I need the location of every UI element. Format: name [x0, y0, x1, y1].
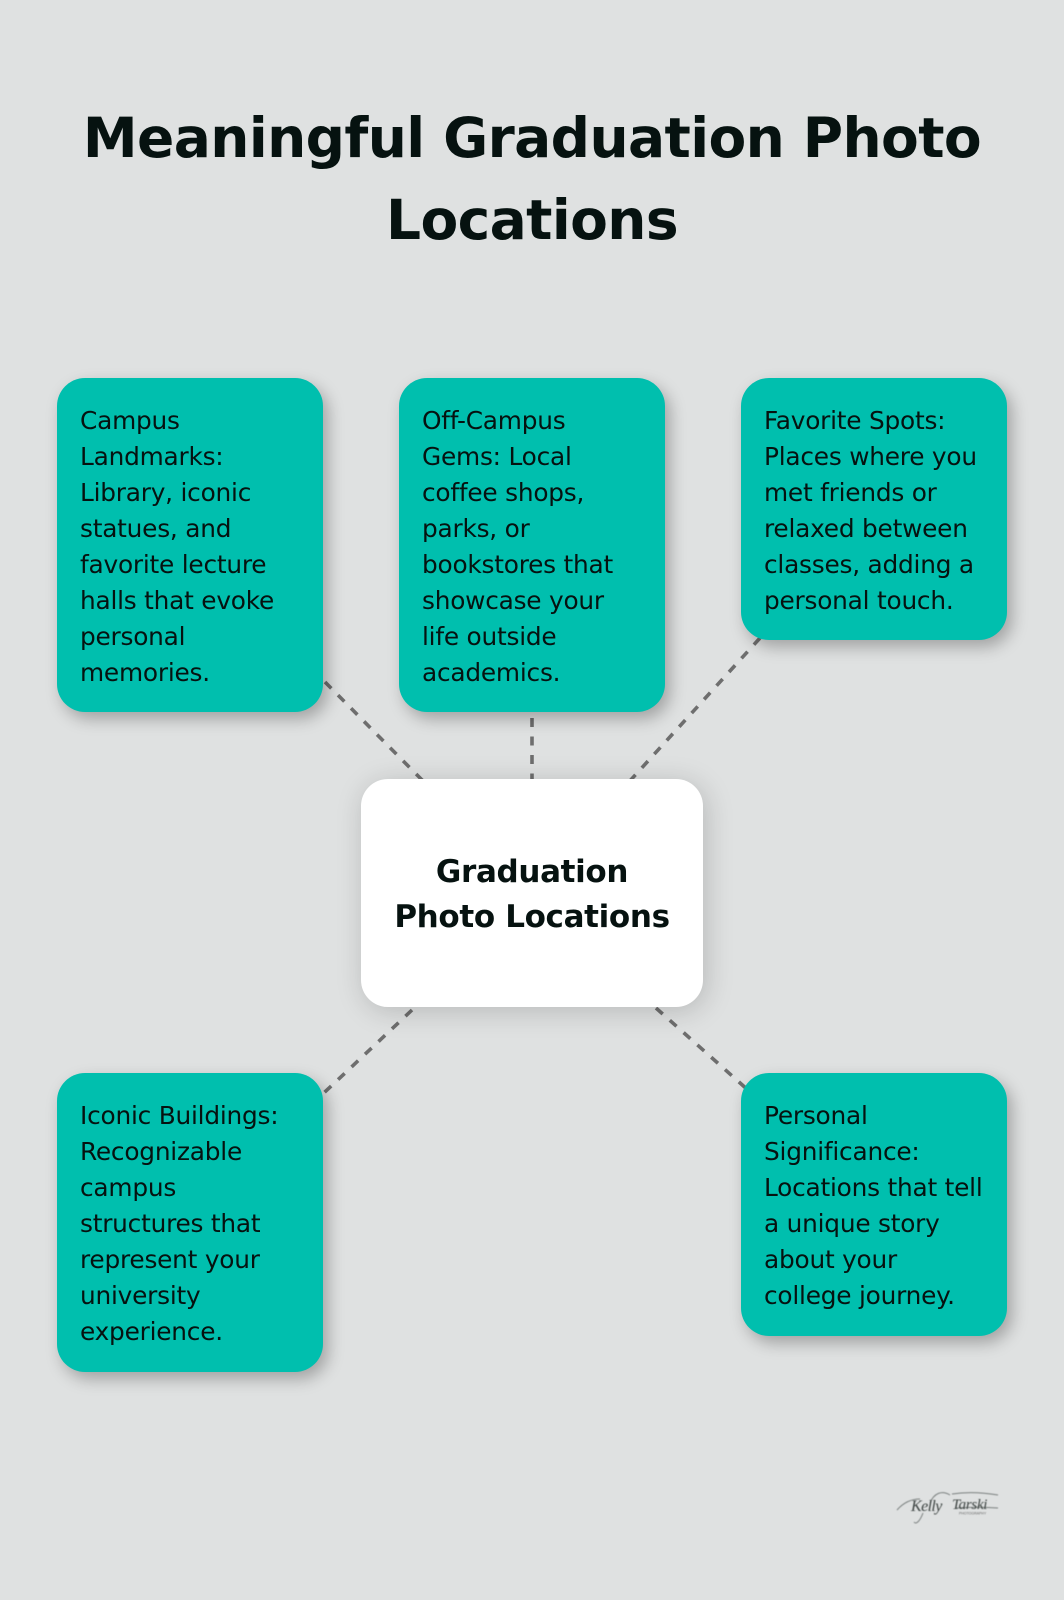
- panel: off-campus gems: bookstores that: [422, 550, 613, 579]
- panel: campus landmarks: Landmarks:: [80, 442, 223, 471]
- panel: favorite spots: met friends or: [764, 478, 937, 507]
- panel: personal significance: college journey.: [764, 1281, 955, 1310]
- panel: off-campus gems: showcase your: [422, 586, 604, 615]
- panel: off-campus gems: parks, or: [422, 514, 530, 543]
- title: Locations: [386, 188, 678, 252]
- panel: off-campus gems: Gems: Local: [422, 442, 572, 471]
- panel: personal significance: Significance:: [764, 1137, 920, 1166]
- panel: personal significance: [741, 1073, 1007, 1336]
- panel: favorite spots: [741, 378, 1007, 640]
- panel: favorite spots: personal touch.: [764, 586, 954, 615]
- panel: favorite spots: Places where you: [764, 442, 977, 471]
- panel: iconic buildings: [57, 1073, 323, 1372]
- panel: personal significance: Personal: [764, 1101, 868, 1130]
- panel: off-campus gems: life outside: [422, 622, 556, 651]
- panel: personal significance: Locations that tell: [764, 1173, 982, 1202]
- panel: campus landmarks: favorite lecture: [80, 550, 266, 579]
- panel: campus landmarks: personal: [80, 622, 185, 651]
- panel: off-campus gems: academics.: [422, 658, 560, 687]
- logo: signature: Kelly: [910, 1498, 943, 1515]
- logo: signature: Tarski: [952, 1497, 987, 1513]
- panel: iconic buildings: Iconic Buildings:: [80, 1101, 278, 1130]
- panel: center node: Graduation: [436, 854, 628, 890]
- logo: signature: [896, 1492, 998, 1524]
- panel: off-campus gems: coffee shops,: [422, 478, 584, 507]
- panel: center node: Photo Locations: [394, 899, 670, 935]
- title: Meaningful Graduation Photo: [83, 106, 981, 170]
- panel: personal significance: about your: [764, 1245, 897, 1274]
- panel: favorite spots: Favorite Spots:: [764, 406, 945, 435]
- title: [83, 106, 981, 252]
- panel: campus landmarks: halls that evoke: [80, 586, 274, 615]
- panel: center node: [361, 779, 703, 1007]
- panel: off-campus gems: Off-Campus: [422, 406, 565, 435]
- panel: favorite spots: relaxed between: [764, 514, 968, 543]
- panel: favorite spots: classes, adding a: [764, 550, 974, 579]
- logo: signature: PHOTOGRAPHY: [959, 1512, 987, 1516]
- panel: iconic buildings: campus: [80, 1173, 176, 1202]
- panel: campus landmarks: statues, and: [80, 514, 231, 543]
- panel: iconic buildings: represent your: [80, 1245, 260, 1274]
- panel: campus landmarks: [57, 378, 323, 712]
- panel: iconic buildings: experience.: [80, 1317, 223, 1346]
- panel: iconic buildings: structures that: [80, 1209, 260, 1238]
- panel: campus landmarks: Campus: [80, 406, 180, 435]
- panel: campus landmarks: Library, iconic: [80, 478, 251, 507]
- panel: off-campus gems: [399, 378, 665, 712]
- panel: personal significance: a unique story: [764, 1209, 940, 1238]
- panel: iconic buildings: Recognizable: [80, 1137, 242, 1166]
- panel: iconic buildings: university: [80, 1281, 200, 1310]
- panel: campus landmarks: memories.: [80, 658, 210, 687]
